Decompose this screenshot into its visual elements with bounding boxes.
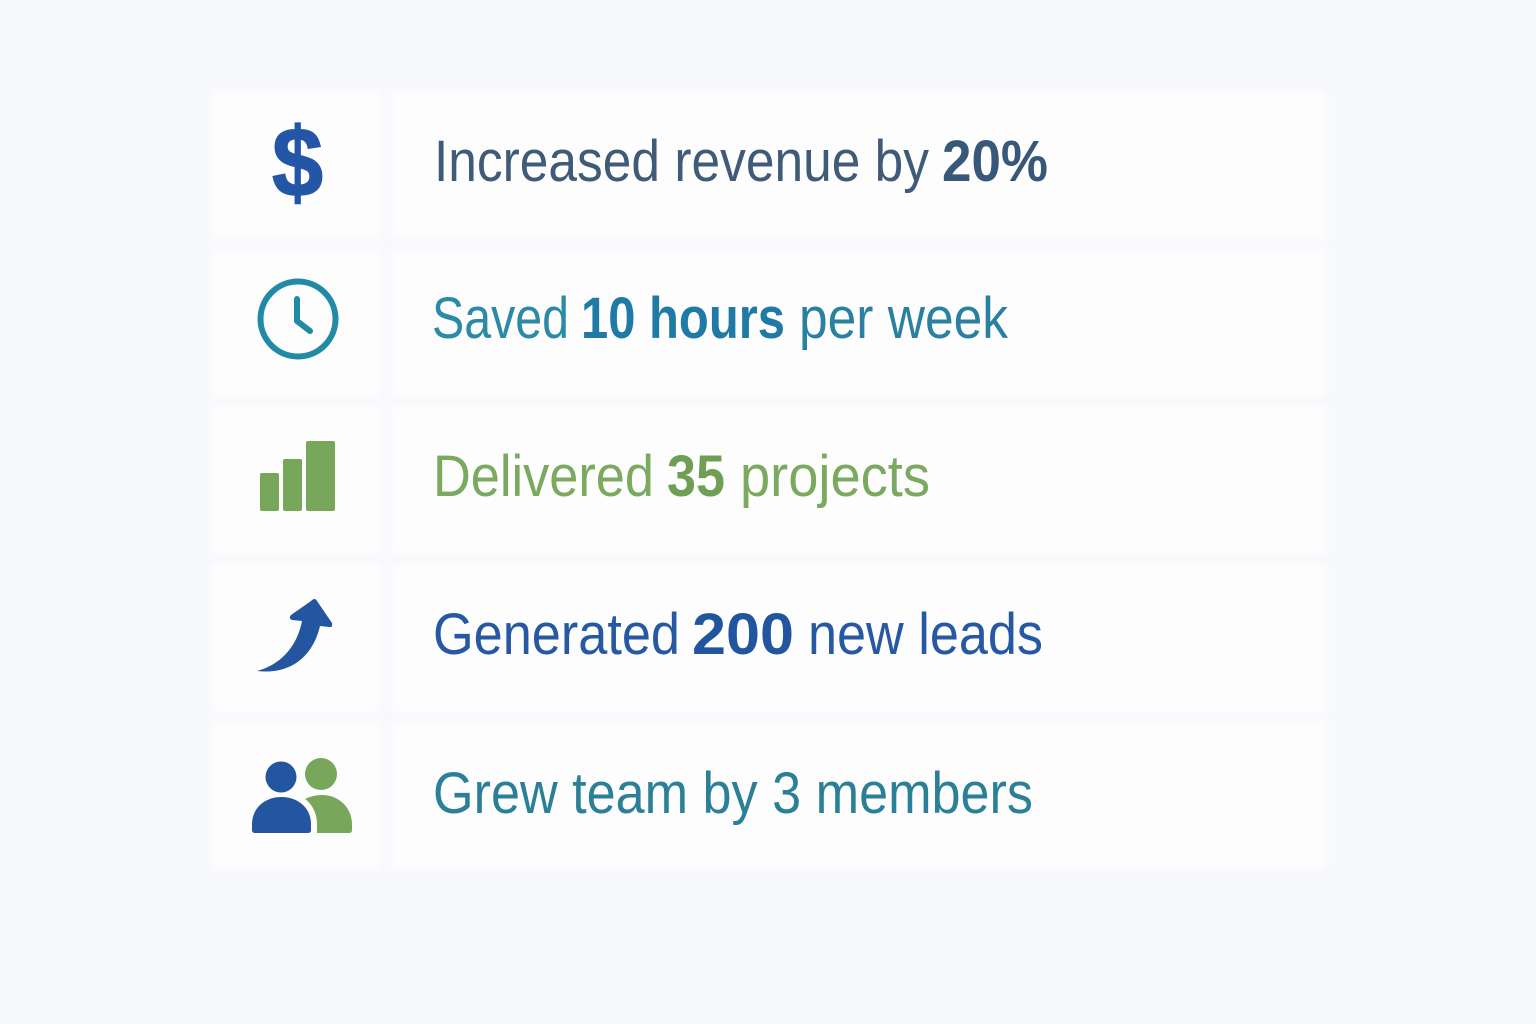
text: increased revenue by 20%: 20%: [942, 129, 1048, 194]
panel: team row: [212, 721, 1326, 869]
text card: revenue: [392, 91, 1326, 239]
text: delivered 35 projects: projects: [740, 444, 930, 509]
icon card: bars: [212, 406, 380, 554]
icon: bar chart: [260, 441, 335, 511]
panel: revenue row: [212, 91, 1326, 239]
icon: rising arrow: [257, 599, 332, 672]
text card: team: [392, 721, 1326, 869]
icon card: clock: [212, 249, 380, 397]
icon card: arrow: [212, 564, 380, 712]
text: delivered 35 projects: [433, 444, 930, 509]
text: saved 10 hours per week: 10 hours: [581, 286, 785, 351]
text: grew team by 3 members: Grew team by 3 members: [433, 761, 1033, 826]
text: saved 10 hours per week: [432, 286, 1009, 351]
panel: leads row: [212, 564, 1326, 712]
icon card: people: [212, 721, 380, 869]
text: increased revenue by 20%: Increased revenue by: [434, 129, 929, 194]
text card: projects: [392, 406, 1326, 554]
text card: hours: [392, 249, 1326, 397]
panel: projects row: [212, 406, 1326, 554]
text: generated 200 new leads: 200: [692, 602, 794, 667]
icon: dollar sign: $: [272, 107, 323, 217]
text: generated 200 new leads: new leads: [808, 602, 1043, 667]
text: saved 10 hours per week: Saved: [432, 286, 569, 351]
text card: leads: [392, 564, 1326, 712]
text: delivered 35 projects: 35: [667, 444, 725, 509]
text: generated 200 new leads: [433, 602, 1043, 667]
panel: hours row: [212, 249, 1326, 397]
icon: team members: [252, 758, 352, 833]
icon card: dollar: [212, 91, 380, 239]
text: delivered 35 projects: Delivered: [433, 444, 654, 509]
text: generated 200 new leads: Generated: [433, 602, 680, 667]
icon: clock: [260, 282, 336, 356]
text: saved 10 hours per week: per week: [799, 286, 1009, 351]
